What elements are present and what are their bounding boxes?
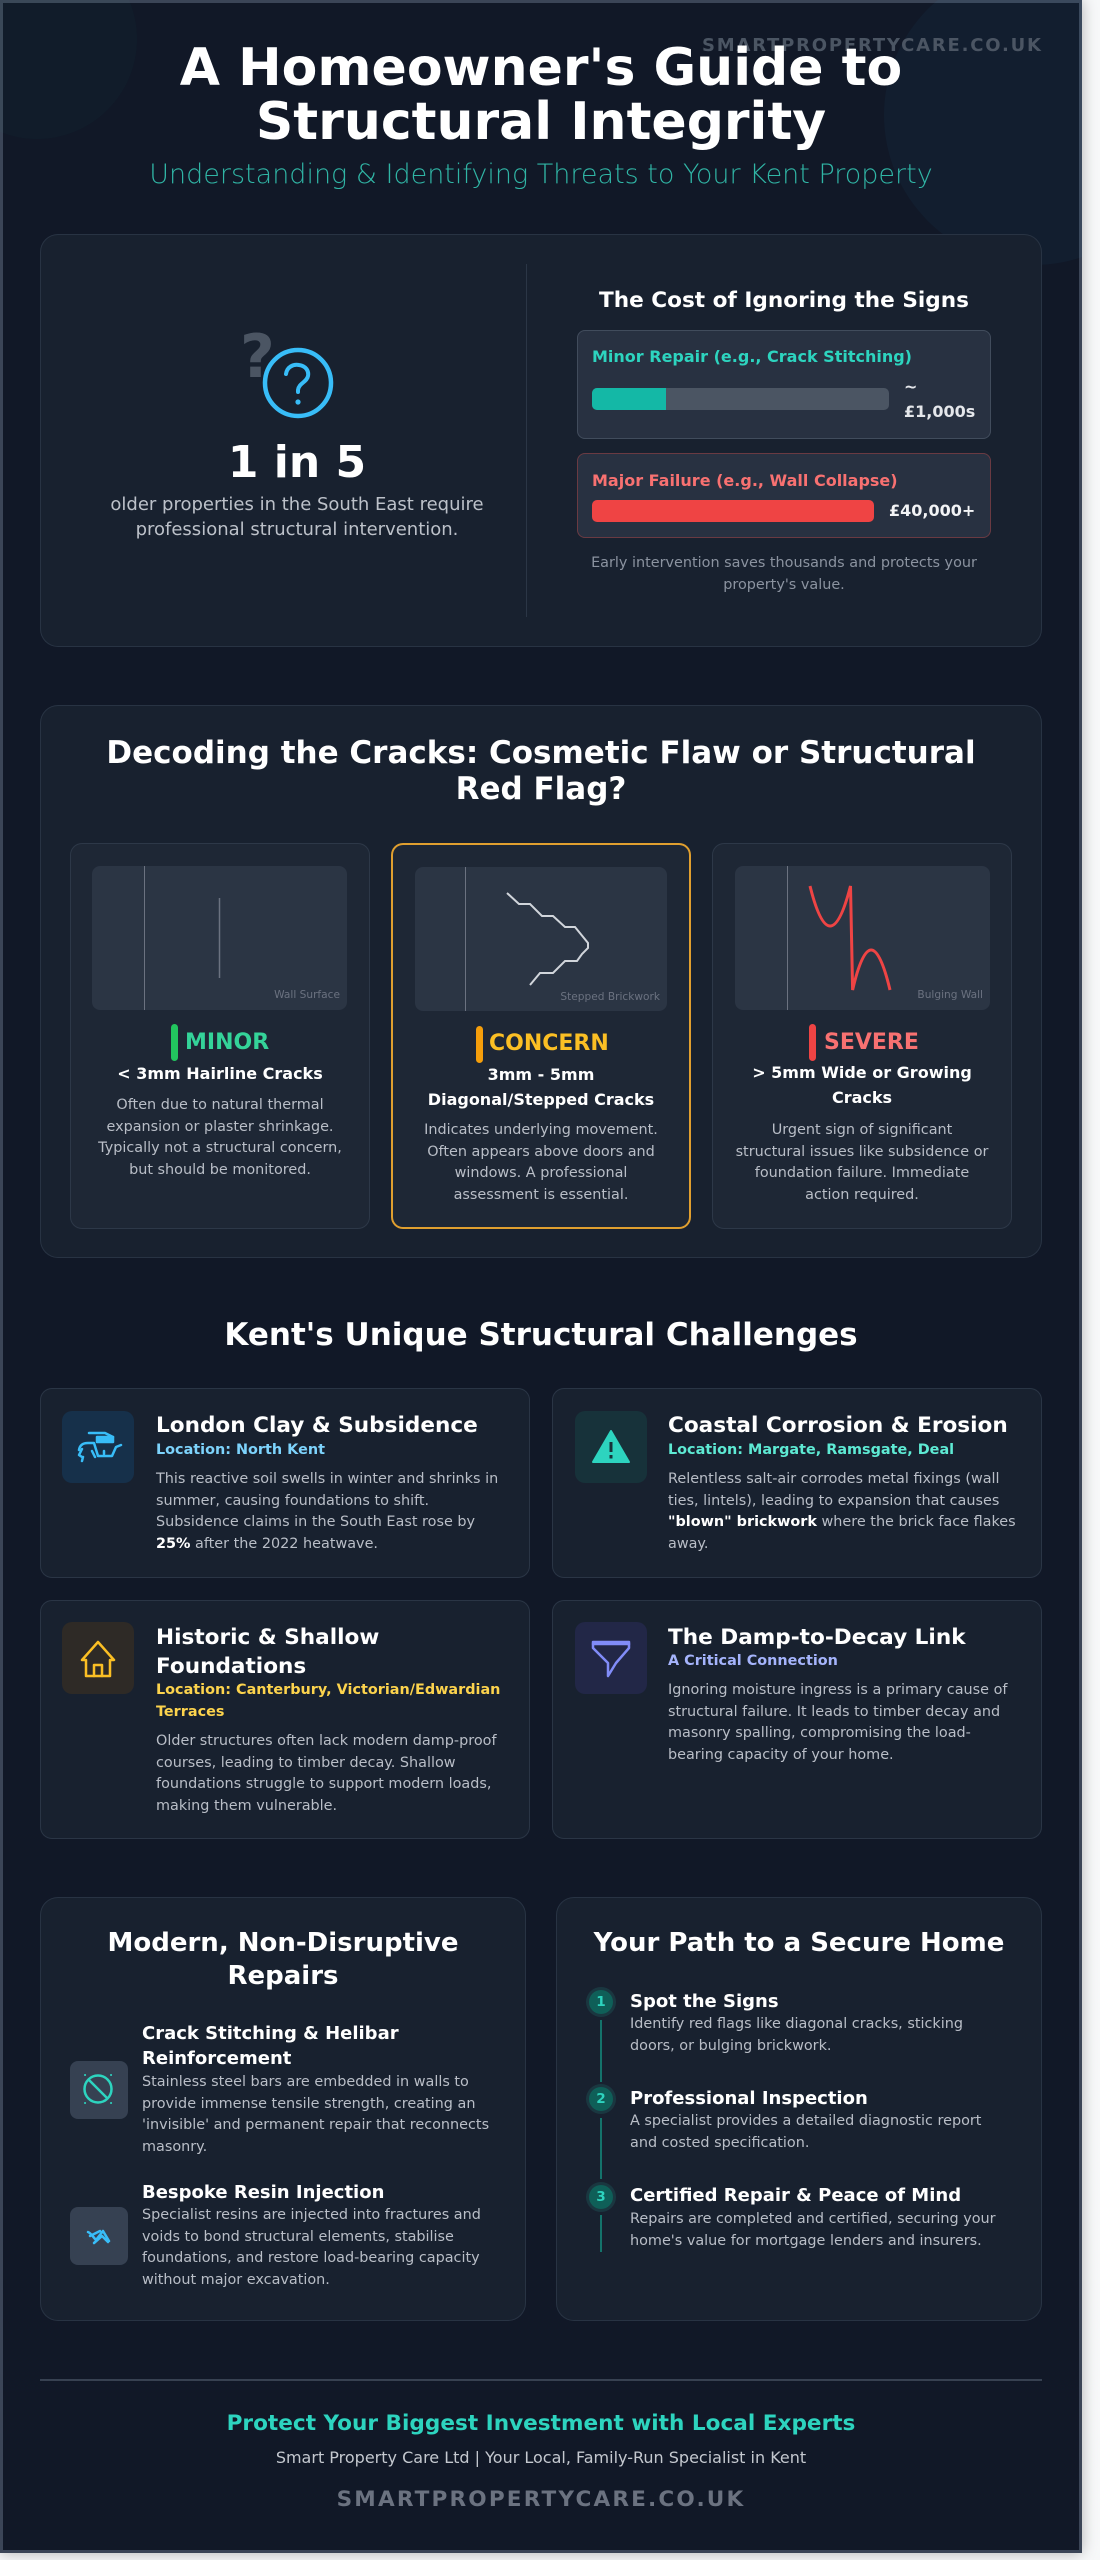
description: windows. A professional: [455, 1165, 627, 1181]
bar fill: [592, 388, 666, 410]
card: coastal corrosion: [552, 1388, 1042, 1578]
card title: Historic & Shallow: [156, 1625, 379, 1650]
location: Location: North Kent: [156, 1442, 325, 1458]
panel: decoding the cracks: [40, 705, 1042, 1258]
card: historic foundations: [40, 1600, 530, 1839]
repair description: foundations, and restore load-bearing capacity: [142, 2250, 480, 2266]
connector: [600, 2118, 602, 2179]
footer rule: [40, 2379, 1042, 2381]
company line: Smart Property Care Ltd | Your Local, Family-Run Specialist in Kent: [276, 2448, 806, 2467]
description: masonry spalling, compromising the load-: [668, 1725, 971, 1741]
location: A Critical Connection: [668, 1653, 838, 1669]
location: [156, 1682, 500, 1720]
step 3 text: Repairs are completed and certified, securing your: [630, 2211, 996, 2227]
card title: Coastal Corrosion & Erosion: [668, 1413, 1008, 1438]
repair title: Crack Stitching & Helibar: [142, 2023, 399, 2044]
value: minor repair: £1,000s: [904, 402, 975, 421]
description: action required.: [805, 1187, 919, 1203]
description: summer, causing foundations to shift.: [156, 1493, 429, 1509]
caption: Stepped Brickwork: [560, 991, 660, 1003]
description: [736, 1122, 988, 1203]
description: Typically not a structural concern,: [98, 1140, 342, 1156]
heading: [106, 735, 976, 807]
repair title: [142, 2023, 399, 2069]
value: minor repair: ~: [904, 377, 917, 396]
bar: major failure: [592, 500, 874, 522]
description: foundations struggle to support modern loads,: [156, 1776, 491, 1792]
heading: Red Flag?: [456, 771, 626, 807]
step 1 title: Spot the Signs: [630, 1991, 779, 2012]
card: minor repair: [577, 330, 991, 439]
step 2 title: Professional Inspection: [630, 2088, 868, 2109]
panel: modern repairs: [40, 1897, 526, 2321]
step 2 number: 2: [596, 2091, 606, 2107]
description: [424, 1122, 658, 1203]
call to action: Protect Your Biggest Investment with Local Experts: [227, 2411, 855, 2436]
description: This reactive soil swells in winter and shrinks in: [156, 1471, 498, 1487]
website: SMARTPROPERTYCARE.CO.UK: [337, 2487, 745, 2512]
label: major failure: Major Failure (e.g., Wall Collapse): [592, 471, 898, 490]
card: London clay: [40, 1388, 530, 1578]
step 1 text: doors, or bulging brickwork.: [630, 2038, 832, 2054]
description: [156, 1471, 498, 1552]
icon: subsidence: [62, 1411, 134, 1483]
heading: Modern, Non-Disruptive: [108, 1928, 458, 1958]
description: courses, leading to timber decay. Shallow: [156, 1755, 456, 1771]
description: Ignoring moisture ingress is a primary cause of: [668, 1682, 1007, 1698]
step 3 title: Certified Repair & Peace of Mind: [630, 2185, 961, 2206]
description: away.: [668, 1536, 708, 1552]
description: bearing capacity of your home.: [668, 1747, 894, 1763]
heading: Repairs: [227, 1961, 339, 1991]
bar: minor repair: [592, 388, 889, 410]
description: Often appears above doors and: [427, 1144, 655, 1160]
repair description: provide immense tensile strength, creating an: [142, 2096, 475, 2112]
repair description: without major excavation.: [142, 2272, 330, 2288]
icon: resin: [70, 2207, 128, 2265]
panel: path to a secure home: [556, 1897, 1042, 2321]
step 2 text: [630, 2113, 982, 2151]
value: major failure: £40,000+: [889, 501, 975, 520]
description: Relentless salt-air corrodes metal fixings (wall: [668, 1471, 1000, 1487]
label: minor repair: Minor Repair (e.g., Crack Stitching): [592, 347, 912, 366]
subtitle: Understanding & Identifying Threats to Your Kent Property: [149, 159, 933, 190]
step 3 text: home's value for mortgage lenders and insurers.: [630, 2233, 982, 2249]
subheading: < 3mm Hairline Cracks: [117, 1064, 323, 1083]
step 1 number: 1: [596, 1994, 606, 2010]
value: minor repair: [904, 377, 975, 421]
panel: statistic and cost: [40, 234, 1042, 647]
card title: [156, 1625, 379, 1679]
repair description: [142, 2074, 489, 2155]
description: Subsidence claims in the South East rose by: [156, 1514, 475, 1530]
severity label: CONCERN: [489, 1031, 609, 1056]
card: concern: [391, 843, 691, 1229]
note: Early intervention saves thousands and protects your: [591, 555, 977, 571]
icon: warning triangle: [575, 1411, 647, 1483]
heading: Your Path to a Secure Home: [594, 1928, 1004, 1958]
severity bar: [476, 1026, 483, 1063]
subheading: > 5mm Wide or Growing: [752, 1063, 972, 1082]
note: property's value.: [723, 577, 845, 593]
card: minor: [70, 843, 370, 1229]
card: severe: [712, 843, 1012, 1229]
card title: Foundations: [156, 1654, 306, 1679]
background circle: blue: [884, 0, 1100, 265]
heading: Kent challenges: Kent's Unique Structural Challenges: [224, 1317, 858, 1353]
title: Structural Integrity: [256, 92, 826, 152]
repair description: [142, 2207, 481, 2288]
statistic caption: professional structural intervention.: [136, 519, 458, 540]
icon: grey question mark: ?: [240, 322, 275, 392]
heading: cost: The Cost of Ignoring the Signs: [599, 288, 969, 313]
icon: circled question mark: [262, 348, 334, 418]
subheading: 3mm - 5mm: [488, 1065, 594, 1084]
repair title: Reinforcement: [142, 2048, 291, 2069]
heading: Decoding the Cracks: Cosmetic Flaw or Structural: [106, 735, 976, 771]
illustration: stepped crack: [415, 867, 667, 1011]
title: [180, 38, 902, 152]
description: Often due to natural thermal: [116, 1097, 324, 1113]
icon: house: [62, 1622, 134, 1694]
card: major failure: [577, 453, 991, 538]
severity bar: [809, 1024, 816, 1061]
step 2 text: and costed specification.: [630, 2135, 809, 2151]
card title: The Damp-to-Decay Link: [668, 1625, 966, 1650]
statistic caption: older properties in the South East require: [110, 494, 484, 515]
repair description: Specialist resins are injected into fractures and: [142, 2207, 481, 2223]
description: Older structures often lack modern damp-proof: [156, 1733, 497, 1749]
connector: [600, 2020, 602, 2082]
heading: [108, 1928, 458, 1991]
description: expansion or plaster shrinkage.: [106, 1119, 334, 1135]
caption: Bulging Wall: [917, 989, 983, 1001]
repair title: Bespoke Resin Injection: [142, 2182, 384, 2203]
description: [668, 1471, 1016, 1552]
caption: Wall Surface: [274, 989, 340, 1001]
step 1 number: [589, 1990, 613, 2014]
step 3 text: [630, 2211, 996, 2249]
step 1 text: Identify red flags like diagonal cracks, sticking: [630, 2016, 963, 2032]
icon: stitching: [70, 2061, 128, 2119]
subheading: [428, 1065, 654, 1109]
description: structural issues like subsidence or: [736, 1144, 988, 1160]
description: ties, lintels), leading to expansion that causes: [668, 1493, 999, 1509]
description: Urgent sign of significant: [772, 1122, 952, 1138]
statistic: 1 in 5: 1 in 5: [228, 437, 366, 488]
description: Indicates underlying movement.: [424, 1122, 658, 1138]
step 2 text: A specialist provides a detailed diagnostic report: [630, 2113, 981, 2129]
repair description: voids to bond structural elements, stabilise: [142, 2229, 454, 2245]
subheading: Cracks: [832, 1088, 892, 1107]
description: "blown" brickwork where the brick face flakes: [668, 1514, 1016, 1530]
illustration: hairline crack: [92, 866, 347, 1010]
divider: [526, 264, 527, 617]
connector: [600, 2215, 602, 2252]
location: Terraces: [156, 1704, 224, 1720]
severity bar: [171, 1024, 178, 1061]
description: assessment is essential.: [454, 1187, 628, 1203]
repair description: 'invisible' and permanent repair that reconnects: [142, 2117, 489, 2133]
title: A Homeowner's Guide to: [180, 38, 902, 98]
subheading: Diagonal/Stepped Cracks: [428, 1090, 654, 1109]
location: Location: Margate, Ramsgate, Deal: [668, 1442, 954, 1458]
description: 25% after the 2022 heatwave.: [156, 1536, 378, 1552]
description: [668, 1682, 1008, 1763]
icon: question marks: [240, 322, 334, 418]
card: damp to decay: [552, 1600, 1042, 1839]
description: but should be monitored.: [129, 1162, 311, 1178]
step 3 number: [589, 2185, 613, 2209]
description: making them vulnerable.: [156, 1798, 337, 1814]
illustration: bulging wall: [735, 866, 990, 1010]
step 1 text: [630, 2016, 963, 2054]
severity label: MINOR: [185, 1030, 269, 1055]
note: [591, 555, 977, 593]
card title: London Clay & Subsidence: [156, 1413, 478, 1438]
description: [98, 1097, 342, 1178]
subheading: [752, 1063, 972, 1107]
repair description: masonry.: [142, 2139, 207, 2155]
description: foundation failure. Immediate: [755, 1165, 969, 1181]
location: Location: Canterbury, Victorian/Edwardian: [156, 1682, 500, 1698]
repair description: Stainless steel bars are embedded in walls to: [142, 2074, 469, 2090]
background circle: teal: [0, 0, 137, 139]
description: [156, 1733, 497, 1814]
step 2 number: [589, 2087, 613, 2111]
step 3 number: 3: [596, 2189, 606, 2205]
description: structural failure. It leads to timber decay and: [668, 1704, 1000, 1720]
watermark: SMARTPROPERTYCARE.CO.UK: [702, 35, 1043, 56]
statistic caption: [110, 494, 484, 540]
footer: [40, 2379, 1042, 2512]
severity label: SEVERE: [824, 1030, 919, 1055]
icon: funnel: [575, 1622, 647, 1694]
